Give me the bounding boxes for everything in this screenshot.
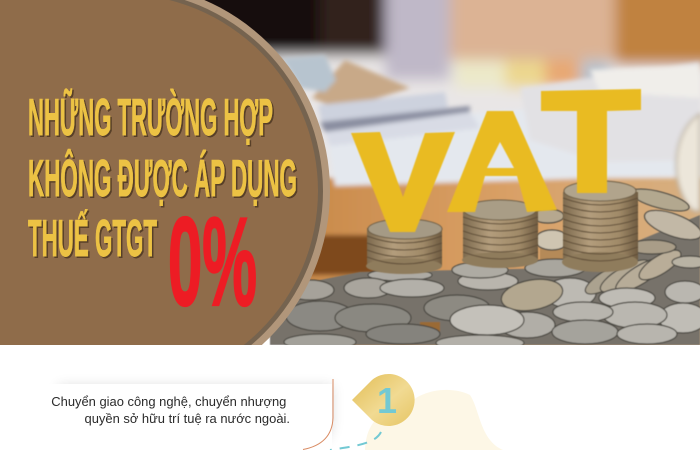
badge: number 1	[352, 374, 415, 426]
title lines	[28, 88, 297, 268]
infographic canvas: KHÔNG ĐƯỢC ÁP DỤNG	[28, 149, 297, 208]
callout shadow	[58, 385, 333, 448]
infographic canvas: NHỮNG TRƯỜNG HỢP	[30, 90, 274, 148]
VAT letters	[351, 89, 641, 232]
blurred office background	[204, 0, 700, 179]
infographic canvas: 0%	[168, 193, 257, 332]
title lines: THUẾ GTGT	[28, 209, 157, 268]
silver coin pile	[270, 185, 700, 351]
stack under A	[462, 200, 538, 268]
callout border	[50, 379, 333, 450]
glass jar	[676, 114, 700, 212]
dashed connector	[330, 432, 381, 450]
stack under V	[366, 219, 442, 274]
stack under T	[562, 181, 638, 272]
infographic canvas: NHỮNG TRƯỜNG HỢP	[28, 88, 273, 147]
title shadow: THUẾ GTGT	[30, 210, 159, 270]
title	[28, 88, 298, 270]
badge: number 1: 1	[377, 380, 397, 421]
desk top	[300, 178, 700, 348]
notebooks	[312, 60, 410, 110]
white lower area	[0, 345, 700, 450]
paper and calculator	[330, 116, 674, 190]
callout text: Chuyển giao công nghệ, chuyển nhượng	[51, 394, 286, 409]
coin stacks	[366, 181, 638, 274]
pale cream blob	[365, 390, 503, 450]
photo: VAT letters on coin stacks	[204, 0, 700, 345]
title shadow	[30, 90, 298, 270]
callout text: quyền sở hữu trí tuệ ra nước ngoài.	[85, 411, 290, 426]
callout: item 1	[40, 379, 333, 450]
infographic canvas: KHÔNG ĐƯỢC ÁP DỤNG	[30, 150, 298, 210]
brown circular title panel	[0, 0, 330, 399]
